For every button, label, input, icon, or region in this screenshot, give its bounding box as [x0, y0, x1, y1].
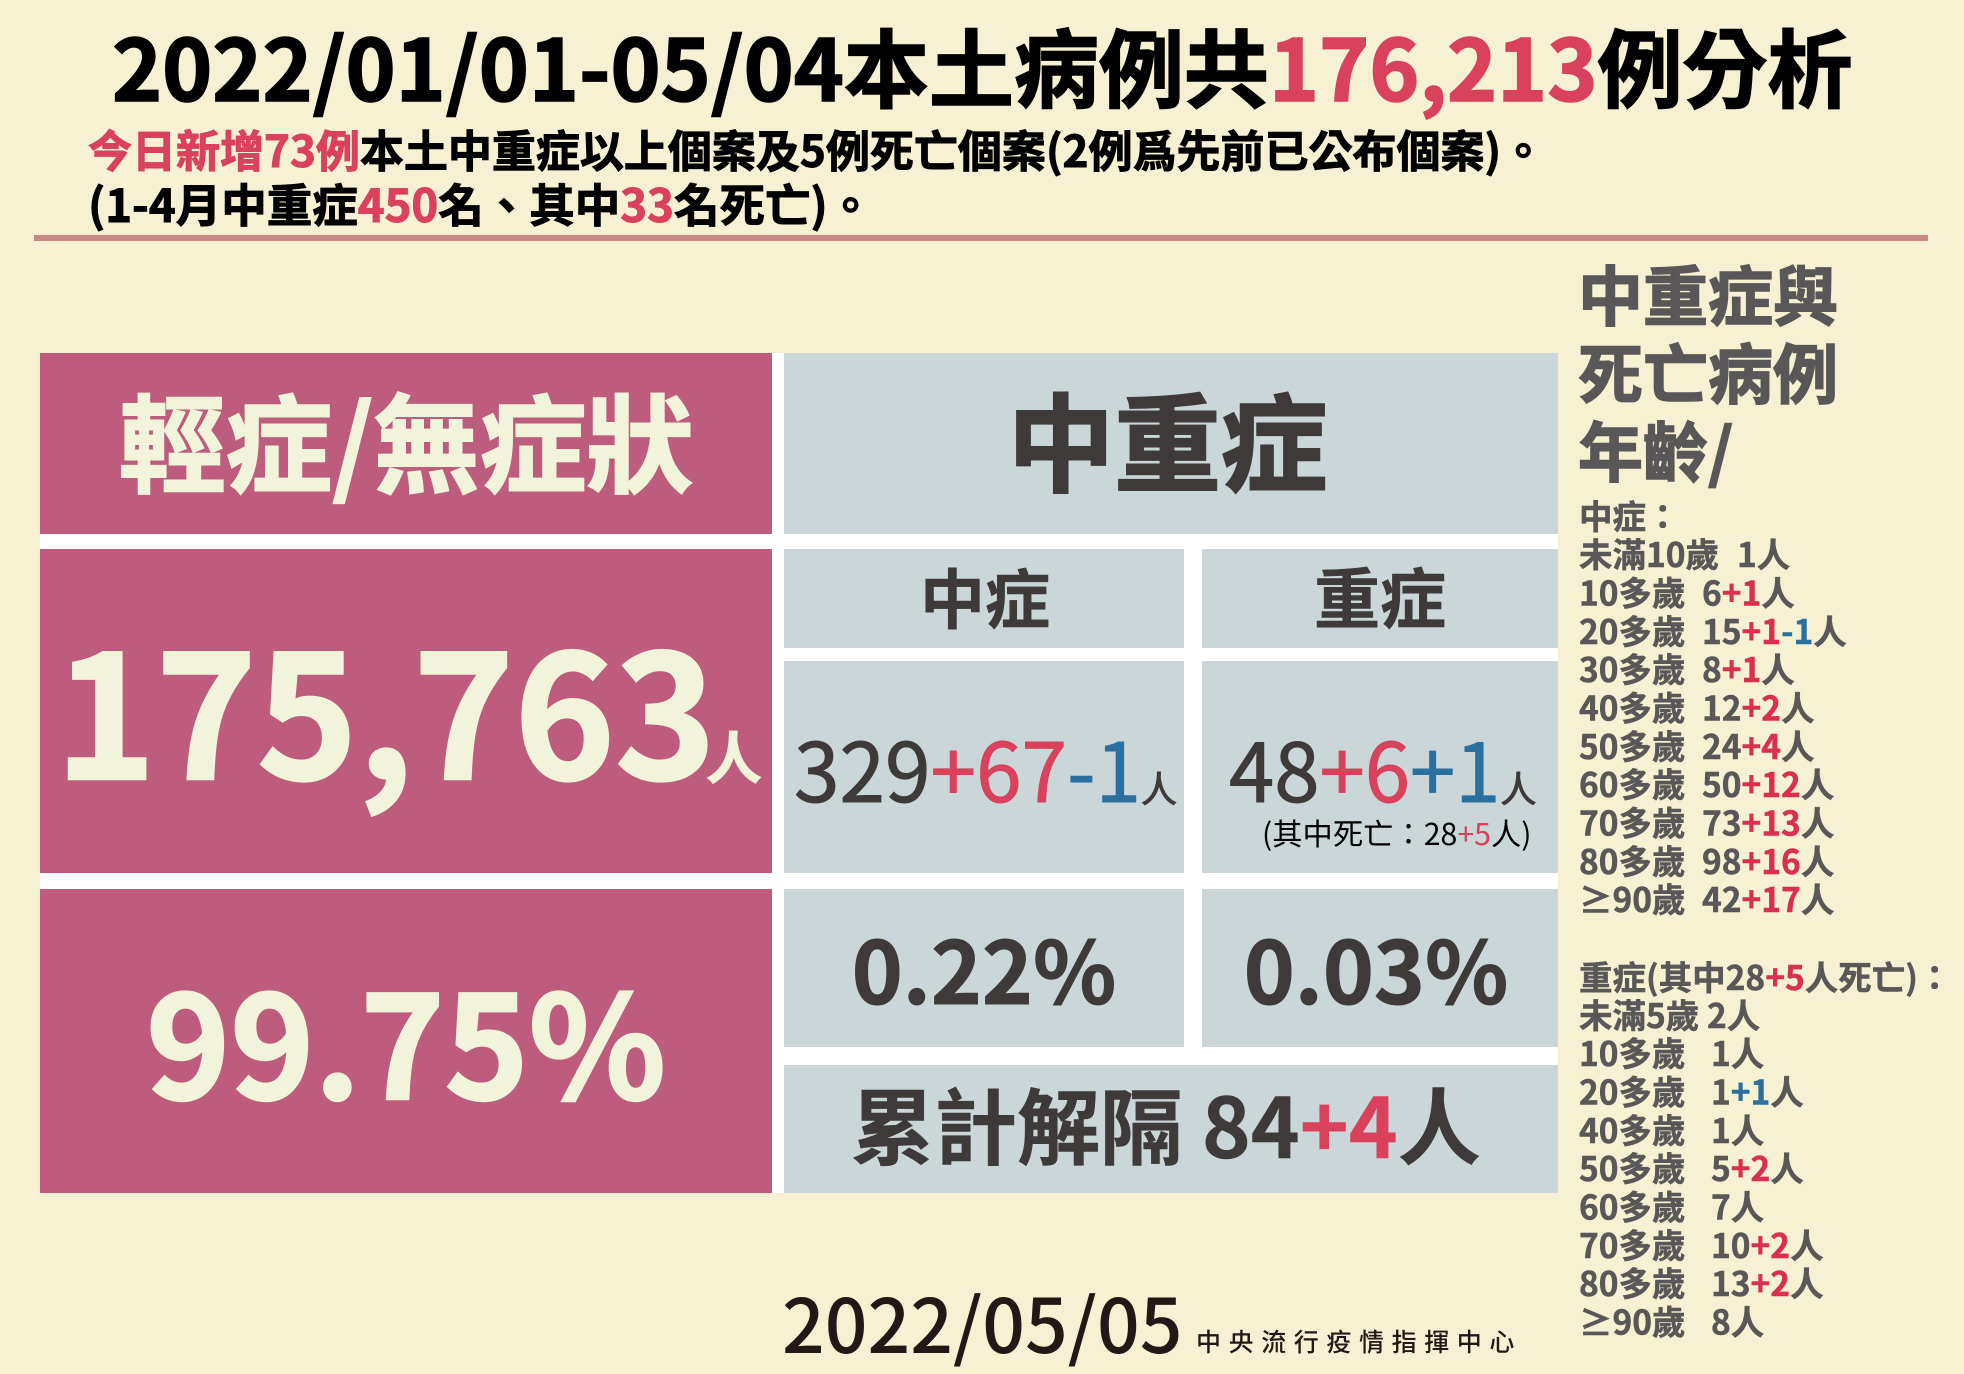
panel: moderate and severe header: 中重症 — [1008, 359, 1327, 514]
panel: mild cases percentage: 99.75% — [146, 935, 666, 1141]
moderate age list: 50+12人 — [1702, 758, 1834, 807]
panel: moderate percentage — [784, 889, 1184, 1047]
moderate age list: 未滿10歲 — [1579, 528, 1719, 577]
panel: moderate count: 329+67-1人 — [794, 707, 1177, 826]
moderate age list: 70多歲 — [1579, 796, 1686, 846]
panel: mild cases count: 175,763人 — [55, 582, 762, 829]
severe age list: 60多歲 — [1579, 1180, 1686, 1230]
panel: moderate header: 中症 — [920, 548, 1050, 642]
panel: mild cases header: 輕症/無症狀 — [119, 360, 693, 515]
severe age list: 5+2人 — [1711, 1142, 1804, 1191]
severe age list: 70多歲 — [1579, 1219, 1686, 1268]
severe age list: 7人 — [1711, 1180, 1764, 1230]
severe age list: 1+1人 — [1711, 1066, 1804, 1114]
panel: severe header — [1202, 547, 1558, 648]
severe age list: 40多歲 — [1579, 1104, 1686, 1153]
panel: moderate header — [784, 548, 1184, 648]
side heading: 年齡/ — [1578, 401, 1733, 495]
moderate age list: 8+1人 — [1702, 643, 1795, 692]
panel: severe count — [1202, 661, 1558, 873]
moderate age list: 50多歲 — [1579, 720, 1686, 769]
moderate age list: 80多歲 — [1579, 835, 1686, 884]
side heading: 中重症與 — [1578, 245, 1838, 339]
severe age list — [1579, 951, 1951, 1344]
severe age list: 未滿5歲 — [1579, 989, 1699, 1038]
severe age list: 20多歲 — [1579, 1066, 1686, 1114]
severe age list: 10多歲 — [1579, 1027, 1686, 1076]
severe age list: 10+2人 — [1711, 1219, 1824, 1268]
moderate age list: 1人 — [1737, 528, 1790, 577]
table backing — [40, 353, 1558, 1193]
panel: severe percentage: 0.03% — [1244, 904, 1508, 1029]
panel: mild cases percentage — [40, 889, 772, 1193]
moderate age list: 6+1人 — [1702, 566, 1795, 616]
severe age list: 80多歲 — [1579, 1257, 1686, 1306]
moderate age list: 20多歲 — [1579, 605, 1686, 654]
moderate age list: 42+17人 — [1702, 873, 1834, 922]
moderate age list — [1579, 490, 1847, 922]
moderate age list: ≥90歲 — [1579, 873, 1686, 922]
moderate age list: 中症： — [1579, 490, 1680, 539]
panel: severe percentage — [1202, 889, 1558, 1047]
severe age list: 1人 — [1711, 1027, 1764, 1076]
severe age list: 13+2人 — [1711, 1257, 1824, 1306]
severe age list: 8人 — [1711, 1296, 1764, 1344]
issuing agency: 中央流行疫情指揮中心 — [1196, 1323, 1522, 1359]
moderate age list: 24+4人 — [1702, 720, 1815, 769]
moderate age list: 73+13人 — [1702, 796, 1834, 846]
moderate age list: 40多歲 — [1579, 682, 1686, 730]
side heading: 死亡病例 — [1578, 323, 1838, 417]
report date: 2022/05/05 — [782, 1266, 1183, 1374]
panel: moderate percentage: 0.22% — [852, 904, 1116, 1029]
severe age list: 50多歲 — [1579, 1142, 1686, 1191]
subtitle line 2: (1-4月中重症450名、其中33名死亡)。 — [88, 170, 873, 236]
panel: mild cases header — [40, 353, 772, 534]
severe deaths note: (其中死亡：28+5人) — [1262, 810, 1532, 854]
panel: cumulative released: 累計解隔 84+4人 — [851, 1062, 1481, 1182]
moderate age list: 60多歲 — [1579, 758, 1686, 807]
severe age list: ≥90歲 — [1579, 1296, 1686, 1344]
moderate age list: 30多歲 — [1579, 643, 1686, 692]
panel: severe header: 重症 — [1314, 547, 1446, 643]
severe age list: 1人 — [1711, 1104, 1764, 1153]
title: 2022/01/01-05/04本土病例共176,213例分析 — [112, 3, 1852, 126]
moderate age list: 12+2人 — [1702, 682, 1815, 730]
side heading — [1578, 245, 1838, 495]
moderate age list: 10多歲 — [1579, 566, 1686, 616]
moderate age list: 98+16人 — [1702, 835, 1834, 884]
panel: severe count: 48+6+1人 — [1229, 708, 1536, 826]
subtitle line 1: 今日新增73例本土中重症以上個案及5例死亡個案(2例爲先前已公布個案)。 — [88, 116, 1545, 180]
panel: moderate and severe header — [784, 353, 1558, 534]
moderate age list: 15+1-1人 — [1702, 605, 1847, 654]
severe age list: 重症(其中28+5人死亡)： — [1579, 951, 1951, 1000]
severe age list: 2人 — [1707, 989, 1760, 1038]
panel: moderate count — [784, 661, 1184, 873]
